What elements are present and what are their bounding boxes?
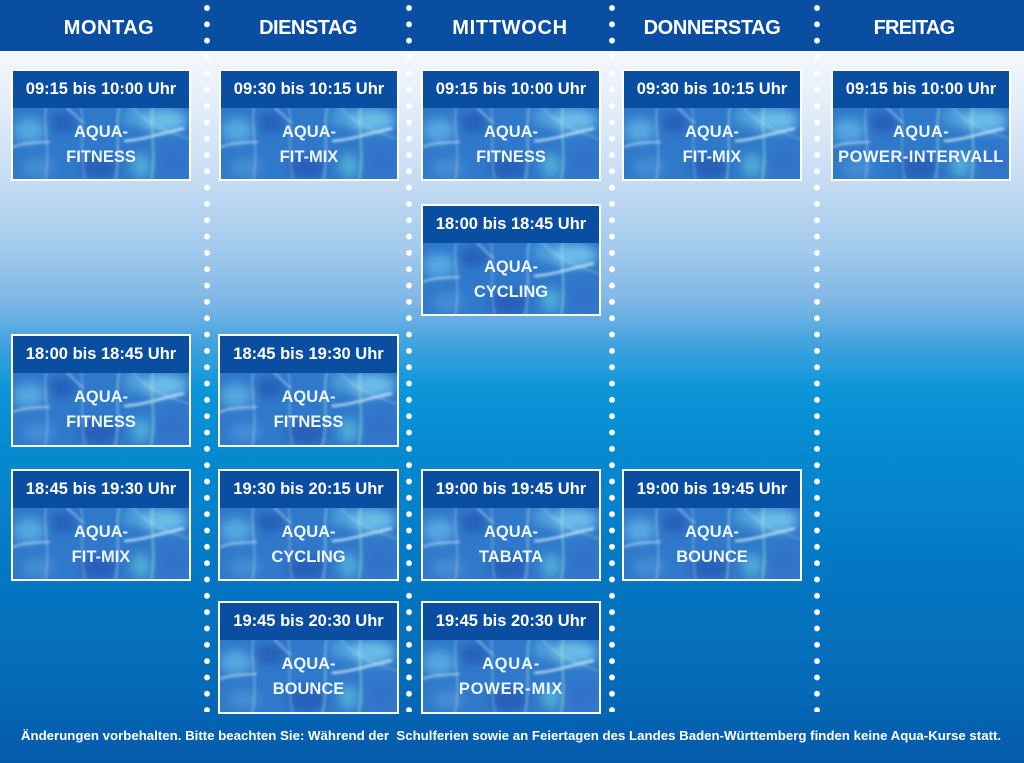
card: Mittwoch 19:00 Aqua-Tabata <box>421 469 601 581</box>
card: Donnerstag 19:00 Aqua-Bounce: 19:00 bis 19:45 Uhr <box>637 480 787 498</box>
card: Donnerstag 19:00 Aqua-Bounce: AQUA- <box>685 523 739 541</box>
card: Montag 09:15 Aqua-Fitness: AQUA- <box>74 123 128 141</box>
card: Mittwoch 09:15 Aqua-Fitness: FITNESS <box>476 148 546 166</box>
card: Dienstag 18:45 Aqua-Fitness: AQUA- <box>281 388 336 406</box>
card: Freitag 09:15 Aqua-Power-Intervall: POWER-INTERVALL <box>838 148 1004 166</box>
card: Mittwoch 19:45 Aqua-Power-Mix: POWER-MIX <box>459 680 563 698</box>
heading: Montag: MONTAG <box>64 17 154 39</box>
heading: Donnerstag: DONNERSTAG <box>644 17 780 39</box>
card: Mittwoch 09:15 Aqua-Fitness <box>421 69 601 181</box>
card: Mittwoch 19:00 Aqua-Tabata: AQUA- <box>484 523 538 541</box>
card: Freitag 09:15 Aqua-Power-Intervall: 09:15 bis 10:00 Uhr <box>846 80 996 98</box>
card: Dienstag 19:45 Aqua-Bounce: 19:45 bis 20:30 Uhr <box>233 612 384 630</box>
card: Montag 09:15 Aqua-Fitness: FITNESS <box>66 148 136 166</box>
card: Montag 18:45 Aqua-Fit-Mix: AQUA- <box>74 523 128 541</box>
card: Freitag 09:15 Aqua-Power-Intervall: AQUA- <box>893 123 949 141</box>
card: Montag 18:00 Aqua-Fitness: FITNESS <box>66 412 136 430</box>
card: Montag 18:00 Aqua-Fitness <box>11 334 191 447</box>
card: Montag 18:45 Aqua-Fit-Mix <box>11 469 191 581</box>
card: Freitag 09:15 Aqua-Power-Intervall <box>831 69 1011 181</box>
heading: Dienstag: DIENSTAG <box>259 17 357 39</box>
card: Dienstag 09:30 Aqua-Fit-Mix: 09:30 bis 10:15 Uhr <box>234 80 384 98</box>
card: Dienstag 18:45 Aqua-Fitness: 18:45 bis 19:30 Uhr <box>233 345 384 363</box>
card: Dienstag 19:45 Aqua-Bounce: AQUA- <box>281 655 336 673</box>
card: Montag 18:45 Aqua-Fit-Mix: FIT-MIX <box>72 548 130 566</box>
heading: Mittwoch: MITTWOCH <box>452 17 568 39</box>
card: Dienstag 19:45 Aqua-Bounce: BOUNCE <box>273 680 344 698</box>
card: Donnerstag 09:30 Aqua-Fit-Mix: 09:30 bis 10:15 Uhr <box>637 80 787 98</box>
card: Mittwoch 19:00 Aqua-Tabata: 19:00 bis 19:45 Uhr <box>436 480 586 498</box>
card: Dienstag 18:45 Aqua-Fitness: FITNESS <box>274 412 343 430</box>
card: Mittwoch 19:00 Aqua-Tabata: TABATA <box>479 548 543 566</box>
card: Dienstag 19:30 Aqua-Cycling <box>218 469 399 581</box>
card: Donnerstag 19:00 Aqua-Bounce: BOUNCE <box>676 548 748 566</box>
card: Montag 18:45 Aqua-Fit-Mix: 18:45 bis 19:30 Uhr <box>26 480 176 498</box>
card: Montag 09:15 Aqua-Fitness <box>11 69 191 181</box>
heading: Freitag: FREITAG <box>874 17 954 39</box>
card: Dienstag 19:30 Aqua-Cycling: 19:30 bis 20:15 Uhr <box>233 480 384 498</box>
card: Donnerstag 09:30 Aqua-Fit-Mix: FIT-MIX <box>683 148 741 166</box>
card: Mittwoch 19:45 Aqua-Power-Mix: 19:45 bis 20:30 Uhr <box>436 612 586 630</box>
card: Mittwoch 18:00 Aqua-Cycling: 18:00 bis 18:45 Uhr <box>436 215 586 233</box>
card: Donnerstag 19:00 Aqua-Bounce <box>622 469 802 581</box>
card: Montag 18:00 Aqua-Fitness: 18:00 bis 18:45 Uhr <box>26 345 176 363</box>
card: Dienstag 09:30 Aqua-Fit-Mix: AQUA- <box>282 123 336 141</box>
card: Donnerstag 09:30 Aqua-Fit-Mix: AQUA- <box>685 123 739 141</box>
card: Dienstag 09:30 Aqua-Fit-Mix: FIT-MIX <box>280 148 338 166</box>
card: Dienstag 09:30 Aqua-Fit-Mix <box>219 69 399 181</box>
card: Dienstag 19:30 Aqua-Cycling: AQUA- <box>281 523 336 541</box>
card: Dienstag 19:30 Aqua-Cycling: CYCLING <box>271 548 346 566</box>
card: Mittwoch 09:15 Aqua-Fitness: 09:15 bis 10:00 Uhr <box>436 80 586 98</box>
footnote: Änderungen vorbehalten. Bitte beachten Sie: Während der Schulferien sowie an Feiertagen des Landes Baden-Württemberg finden keine Aqua-Kurse statt. <box>21 728 1001 743</box>
card: Mittwoch 09:15 Aqua-Fitness: AQUA- <box>484 123 538 141</box>
card: Dienstag 18:45 Aqua-Fitness <box>218 334 399 447</box>
card: Dienstag 19:45 Aqua-Bounce <box>218 601 399 714</box>
card: Mittwoch 18:00 Aqua-Cycling <box>421 204 601 316</box>
card: Mittwoch 18:00 Aqua-Cycling: CYCLING <box>474 282 548 300</box>
card: Donnerstag 09:30 Aqua-Fit-Mix <box>622 69 802 181</box>
header band with weekdays <box>0 0 1024 51</box>
card: Montag 18:00 Aqua-Fitness: AQUA- <box>74 388 128 406</box>
card: Mittwoch 18:00 Aqua-Cycling: AQUA- <box>484 258 538 276</box>
card: Mittwoch 19:45 Aqua-Power-Mix: AQUA- <box>482 655 540 673</box>
card: Montag 09:15 Aqua-Fitness: 09:15 bis 10:00 Uhr <box>26 80 176 98</box>
card: Mittwoch 19:45 Aqua-Power-Mix <box>421 601 601 714</box>
